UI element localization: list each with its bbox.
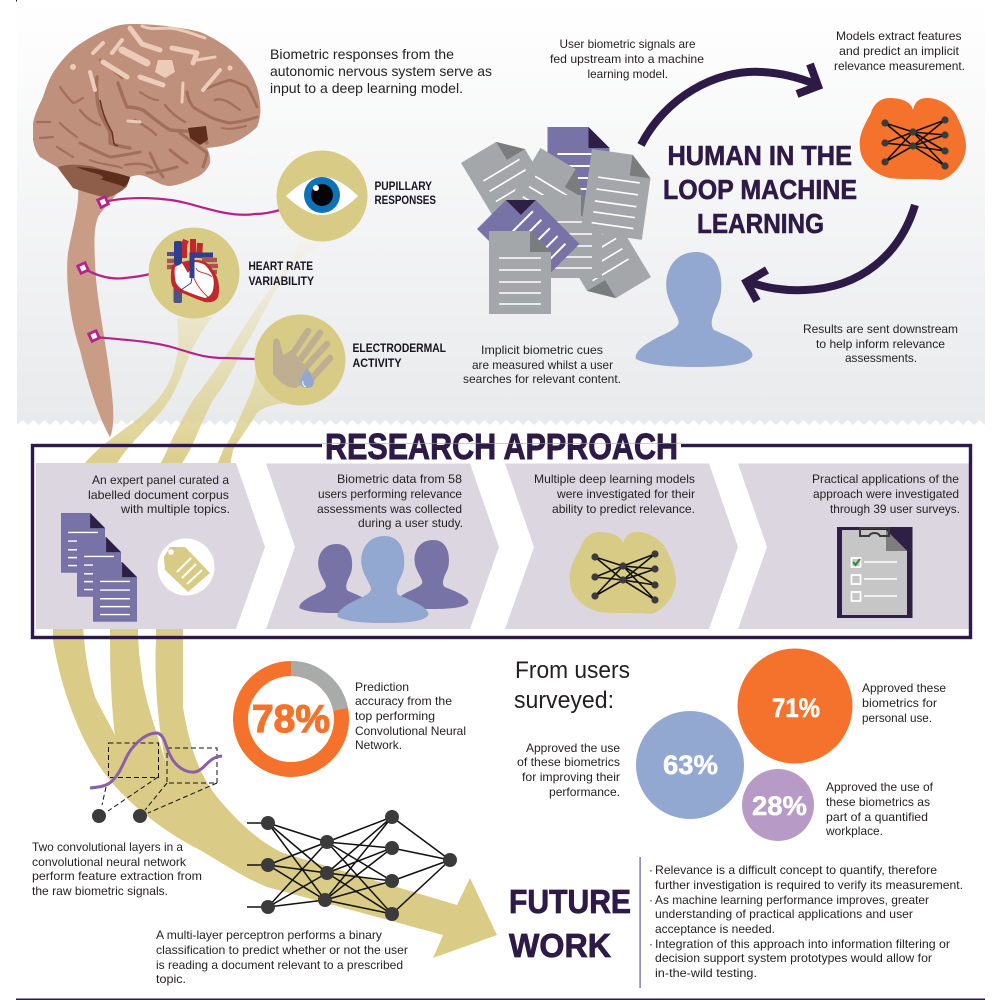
text: multi-layer perceptron: A multi-layer perceptron performs a binary (156, 928, 382, 942)
connector: heart rate line (83, 268, 150, 278)
text: prediction accuracy: accuracy from the (355, 694, 452, 708)
text: user signals upstream: User biometric signals are (560, 37, 696, 51)
text: convolutional layers: convolutional neural network (32, 855, 187, 869)
text: prediction accuracy (355, 680, 466, 752)
text: improving performance: Approved the use (526, 741, 620, 755)
text: improving performance: of these biometrics (517, 755, 620, 769)
text: user signals upstream (550, 37, 704, 81)
text: multi-layer perceptron: classification to predict whether or not the user (156, 943, 408, 957)
text: future work bullets (649, 863, 963, 980)
heading: future work (509, 883, 631, 964)
cerebellum (58, 165, 130, 198)
icon: label tag (158, 538, 214, 596)
text: future work bullets: in-the-wild testing. (655, 966, 757, 980)
text: results sent downstream (803, 322, 958, 365)
text: user signals upstream: fed upstream into a machine (550, 52, 704, 66)
text: step 1: labelled document corpus (88, 488, 229, 502)
text: personal use (862, 681, 946, 725)
label: heart rate variability: VARIABILITY (248, 274, 314, 288)
text: models extract features (834, 29, 965, 73)
arrow: downstream to user (746, 205, 915, 301)
text: implicit biometric cues: are measured whilst a user (472, 358, 613, 372)
step 3 chevron (505, 464, 738, 629)
text: personal use: Approved these (862, 681, 946, 695)
text: step 3: ability to predict relevance. (552, 502, 695, 516)
stat bubble: 71% (738, 648, 852, 764)
text: prediction accuracy: Convolutional Neural (355, 724, 466, 738)
text: convolutional layers: Two convolutional layers in a (32, 840, 183, 854)
step 4 chevron (738, 464, 970, 629)
text: multi-layer perceptron (156, 928, 408, 986)
text: quantified workplace (825, 780, 934, 838)
label: heart rate variability (248, 259, 314, 288)
step 1 chevron (36, 463, 265, 629)
text: step 3 (534, 472, 695, 516)
text: prediction accuracy: Network. (355, 738, 402, 752)
text: step 3: were investigated for their (556, 487, 695, 501)
text: future work bullets: acceptance is needed. (655, 922, 775, 936)
icon: orange brain network (860, 98, 966, 180)
text: future work bullets: understanding of practical applications and user (655, 907, 913, 921)
icon: three documents (61, 513, 137, 622)
text: future work bullets: As machine learning performance improves, greater (655, 893, 929, 907)
icon: survey clipboard (837, 527, 912, 618)
text: results sent downstream: to help inform relevance (816, 337, 945, 351)
text: multi-layer perceptron: is reading a document relevant to a prescribed (156, 958, 403, 972)
research approach frame (32, 446, 970, 638)
label: electrodermal activity (352, 341, 446, 370)
icon: gold brain network (570, 532, 676, 614)
heading: from users surveyed (514, 657, 630, 714)
title: human in the loop machine learning (663, 140, 857, 239)
text: models extract features: Models extract features (836, 29, 962, 43)
text: step 2 (317, 472, 463, 530)
text: step 1 (88, 473, 230, 516)
title: human in the loop machine learning: LEARNING (697, 208, 824, 239)
donut chart: 78% accuracy (240, 668, 342, 770)
icon: user silhouette (636, 252, 753, 367)
arrow: upstream to model (641, 64, 818, 145)
text: future work bullets: Integration of this approach into information filtering or (655, 937, 950, 951)
connector nodes on spine (78, 197, 108, 341)
heading: from users surveyed: From users (515, 657, 630, 684)
title: human in the loop machine learning: HUMAN IN THE (668, 140, 852, 171)
text: future work bullets: · (649, 893, 653, 907)
background panel: human in the loop section (17, 0, 985, 425)
text: future work bullets: · (649, 937, 653, 951)
biometric ribbons flowing to research approach (85, 238, 332, 470)
text: implicit biometric cues: Implicit biometric cues (481, 343, 603, 357)
stat bubble: 63%: 63% (663, 750, 718, 780)
text: biometric responses intro: autonomic nervous system serve as (270, 63, 492, 79)
text: results sent downstream: assessments. (845, 351, 917, 365)
text: step 3: Multiple deep learning models (534, 472, 695, 486)
icon: eye (276, 150, 368, 242)
text: step 1: with multiple topics. (120, 502, 230, 516)
icon: heart (148, 228, 240, 318)
text: step 4: approach were investigated (813, 487, 959, 501)
text: future work bullets: · (649, 863, 653, 877)
text: convolutional layers: the raw biometric signals. (32, 884, 168, 898)
text: models extract features: and predict an implicit (839, 44, 960, 58)
top rule (16, 0, 526, 2)
diagram: convolution windows on signal (90, 733, 222, 823)
label: pupillary responses (374, 179, 436, 207)
text: prediction accuracy: top performing (355, 709, 435, 723)
icon: brain (33, 24, 260, 198)
text: quantified workplace: Approved the use of (826, 780, 934, 794)
stat bubble: 28%: 28% (752, 791, 807, 821)
dark fissures (100, 100, 118, 146)
text: future work bullets: decision support system prototypes would allow for (655, 951, 932, 965)
panel: research approach steps (36, 463, 970, 629)
text: future work bullets: further investigation is required to verify its measurement. (655, 878, 963, 892)
spinal cord (67, 185, 121, 437)
diagram: multi-layer perceptron (247, 810, 457, 921)
icon: three users (299, 536, 468, 623)
text: step 4: Practical applications of the (812, 472, 959, 486)
text: quantified workplace: these biometrics as (826, 795, 930, 809)
label: heart rate variability: HEART RATE (248, 259, 313, 273)
text: future work bullets: Relevance is a difficult concept to quantify, therefore (655, 863, 937, 877)
text: biometric responses intro (270, 46, 492, 96)
text: step 2: Biometric data from 58 (337, 472, 462, 486)
label: pupillary responses: PUPILLARY (374, 179, 432, 193)
text: quantified workplace: part of a quantified (826, 810, 928, 824)
text: models extract features: relevance measurement. (834, 59, 965, 73)
text: implicit biometric cues (463, 343, 621, 386)
text: step 4: through 39 user surveys. (830, 502, 960, 516)
label: electrodermal activity: ACTIVITY (352, 356, 402, 370)
stat bubble: 71%: 71% (772, 693, 820, 723)
text: biometric responses intro: Biometric responses from the (270, 46, 454, 62)
text: improving performance: performance. (549, 785, 620, 799)
text: multi-layer perceptron: topic. (156, 972, 186, 986)
heading: research approach: RESEARCH APPROACH (325, 426, 678, 467)
text: user signals upstream: learning model. (588, 67, 668, 81)
label: pupillary responses: RESPONSES (374, 193, 436, 207)
title: human in the loop machine learning: LOOP MACHINE (663, 174, 857, 205)
heading: future work: FUTURE (509, 883, 631, 920)
text: implicit biometric cues: searches for relevant content. (463, 372, 621, 386)
text: improving performance: for improving their (522, 770, 620, 784)
text: biometric responses intro: input to a deep learning model. (270, 80, 463, 96)
sulci (37, 60, 257, 177)
text: quantified workplace: workplace. (825, 824, 883, 838)
text: results sent downstream: Results are sent downstream (803, 322, 958, 336)
connector: pupillary responses line (103, 198, 280, 215)
connector: electrodermal line (94, 337, 256, 359)
text: improving performance (517, 741, 620, 799)
text: step 2: assessments was collected (317, 502, 462, 516)
label: electrodermal activity: ELECTRODERMAL (352, 341, 446, 355)
text: step 2: during a user study. (358, 516, 463, 530)
donut chart: 78% accuracy: 78% (252, 698, 330, 741)
text: convolutional layers (32, 840, 202, 898)
heading: from users surveyed: surveyed: (514, 687, 614, 714)
heading: future work: WORK (509, 927, 611, 964)
big ribbon arrow toward future work (53, 625, 497, 958)
text: prediction accuracy: Prediction (355, 680, 409, 694)
text: personal use: biometrics for (862, 696, 937, 710)
stat bubble: 28% (742, 769, 814, 841)
step 2 chevron (266, 464, 499, 629)
icon: pile of documents (461, 127, 653, 314)
icon: hand with sweat drop (254, 314, 346, 406)
text: step 2: users performing relevance (318, 487, 462, 501)
text: step 1: An expert panel curated a (92, 473, 229, 487)
stat bubble: 63% (636, 711, 744, 819)
text: step 4 (812, 472, 960, 516)
text: personal use: personal use. (862, 711, 932, 725)
text: convolutional layers: perform feature extraction from (32, 869, 202, 883)
light gyri (90, 26, 220, 122)
